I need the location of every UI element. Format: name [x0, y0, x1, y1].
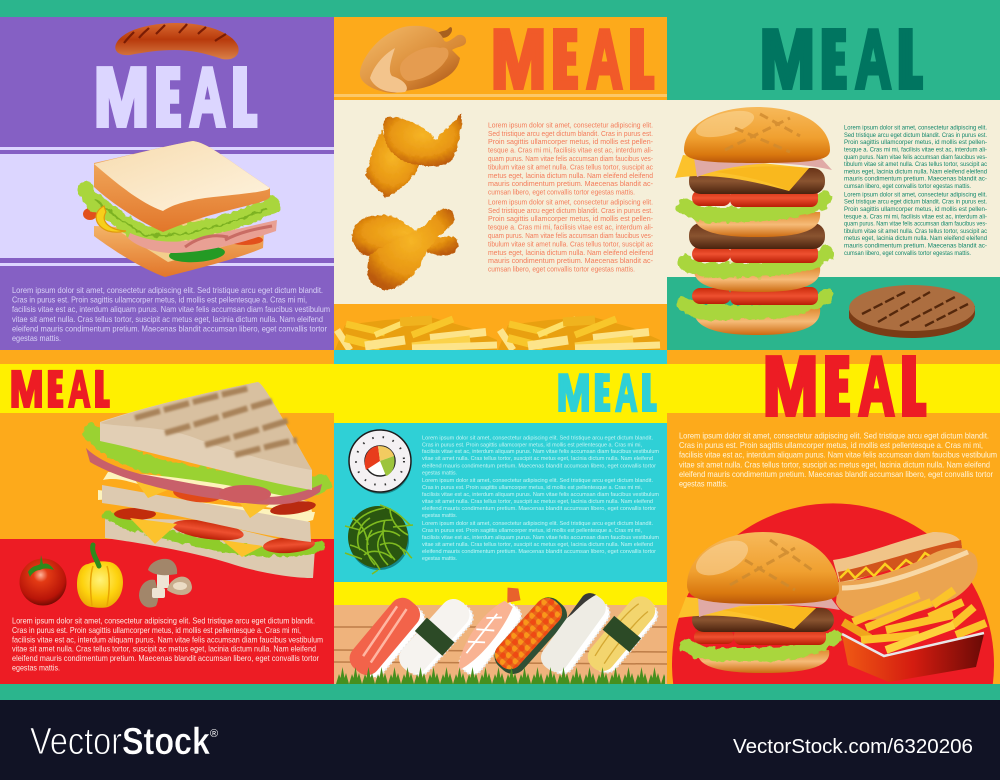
icon: french fries row [335, 317, 660, 350]
heading: MEAL: A [190, 50, 226, 144]
text block: burger panel: Proin sagittis ullamcorper metus, id mollis est pellen- [844, 139, 987, 146]
text block: sushi panel: eleifend mauris condimentum pretium. Maecenas blandit accumsan libero, eget convallis tortor [422, 549, 656, 555]
text block: sushi panel: egestas mattis. [422, 513, 457, 519]
icon: yellow pepper [77, 545, 123, 608]
text block: red panel: facilisis vitae est ac, interdum aliquam purus. Nam vitae felis accumsan diam faucibus vestibulum [12, 634, 323, 644]
icon: fries in red tray [842, 590, 986, 682]
text block: chicken panel: tibulum vitae sit amet nulla. Cras tellus tortor, suscipit ac [488, 162, 653, 171]
heading: MEAL: A [615, 364, 637, 422]
text block: sushi panel: Cras in purus est. Proin sagittis ullamcorper metus, id mollis est pellentesque a. Cras mi mi, [422, 528, 642, 534]
icon: grilled patty [849, 285, 975, 338]
panel: burger and hot dog [667, 340, 1000, 684]
text block: sushi panel: eleifend mauris condimentum pretium. Maecenas blandit accumsan libero, eget convallis tortor [422, 463, 656, 469]
panel: sushi: L [642, 364, 657, 422]
heading: MEAL: E [553, 12, 578, 106]
text block: burger panel: Proin sagittis ullamcorper metus, id mollis est pellen- [844, 206, 987, 213]
text block: sushi panel: facilisis vitae est ac, interdum aliquam purus. Nam vitae felis accumsan diam faucibus vestibulum [422, 535, 659, 541]
text block: burger panel: Sed tristique arcu eget dictum blandit. Cras in purus est. [844, 199, 987, 206]
icon: fried wing pieces [365, 114, 462, 198]
icon: tamago nigiri [580, 589, 664, 679]
heading: MEAL [763, 340, 926, 432]
text block: purple panel: vitae sit amet nulla. Cras tellus tortor, suscipit ac metus eget, lacinia dictum nulla. Nam eleifend [12, 314, 323, 324]
text block: burger panel: tibulum vitae sit amet nulla. Cras tellus tortor, suscipit ac [844, 228, 988, 235]
heading: MEAL: A [68, 360, 90, 418]
icon: cheeseburger [678, 532, 840, 673]
icon: sushi roll [349, 430, 411, 494]
text block: purple panel: egestas mattis. [12, 333, 61, 343]
text block: burger and hot dog panel: egestas mattis. [679, 479, 728, 489]
icon: club sandwich [86, 382, 322, 578]
text block: sushi panel: egestas mattis. [422, 471, 457, 477]
text block: sushi panel [422, 435, 659, 562]
text block: red panel: eleifend mauris condimentum pretium. Maecenas blandit accumsan libero, eget convallis tortor [12, 653, 319, 663]
text block: chicken panel: metus eget, lacinia dictum nulla. Nam eleifend eleifend [488, 248, 653, 257]
heading: MEAL [557, 364, 657, 422]
panel: teal burger [667, 12, 1000, 350]
text block: sushi panel: facilisis vitae est ac, interdum aliquam purus. Nam vitae felis accumsan diam faucibus vestibulum [422, 492, 659, 498]
text block: sushi panel: vitae sit amet nulla. Cras tellus tortor, suscipit ac metus eget, lacinia dictum nulla. Nam eleifend [422, 456, 653, 462]
icon: salmon nigiri [344, 592, 430, 684]
text block: burger panel: mauris condimentum pretium. Maecenas blandit ac- [844, 176, 987, 183]
text block: burger panel: tesque a. Cras mi mi, facilisis vitae est ac, interdum ali- [844, 146, 987, 154]
text block: chicken panel: mauris condimentum pretium. Maecenas blandit ac- [488, 179, 653, 188]
heading: MEAL: M [491, 12, 546, 106]
heading: MEAL [10, 360, 110, 418]
icon: roast chicken [360, 26, 466, 93]
heading: MEAL: A [586, 12, 622, 106]
text block: purple panel: facilisis vitae est ac, interdum aliquam purus. Nam vitae felis accumsan diam faucibus vestibulum [12, 304, 330, 314]
heading: MEAL: M [94, 50, 149, 144]
decorative grass strip [336, 664, 665, 684]
text block: chicken panel: Lorem ipsum dolor sit amet, consectetur adipiscing elit. [488, 197, 653, 206]
text block: chicken panel: tibulum vitae sit amet nulla. Cras tellus tortor, suscipit ac [488, 239, 653, 248]
heading: MEAL: A [855, 12, 891, 106]
text block: sushi panel: eleifend mauris condimentum pretium. Maecenas blandit accumsan libero, eget convallis tortor [422, 506, 656, 512]
text block: sushi panel: Cras in purus est. Proin sagittis ullamcorper metus, id mollis est pellentesque a. Cras mi mi, [422, 485, 642, 491]
panel: burger and hot dog: L [902, 340, 926, 432]
panel: sushi [334, 350, 667, 684]
heading: MEAL [491, 12, 654, 106]
text block: chicken panel: Sed tristique arcu eget dictum blandit. Cras in purus est. [488, 206, 653, 215]
text block: purple panel: eleifend mauris condimentum pretium. Maecenas blandit accumsan libero, eget convallis tortor [12, 323, 327, 333]
icon: fried drumsticks [352, 209, 458, 290]
text block: purple panel [12, 285, 330, 343]
decorative red circle [672, 503, 994, 684]
text block: chicken panel: Sed tristique arcu eget dictum blandit. Cras in purus est. [488, 129, 653, 138]
text block: chicken panel: quam purus. Nam vitae felis accumsan diam faucibus ves- [488, 231, 653, 240]
text block: red panel: egestas mattis. [12, 662, 60, 672]
heading: MEAL: M [10, 360, 44, 418]
heading: MEAL [94, 50, 257, 144]
text block: chicken panel: metus eget, lacinia dictum nulla. Nam eleifend eleifend [488, 171, 653, 180]
text block: chicken panel: tesque a. Cras mi mi, facilisis vitae est ac, interdum ali- [488, 223, 653, 232]
text block: sushi panel: vitae sit amet nulla. Cras tellus tortor, suscipit ac metus eget, lacinia dictum nulla. Nam eleifend [422, 542, 653, 548]
heading: MEAL: E [156, 50, 182, 144]
panel: orange chicken: L [630, 12, 654, 106]
heading: MEAL: M [763, 340, 818, 432]
text block: red panel: vitae sit amet nulla. Cras tellus tortor, suscipit ac metus eget, lacinia dictum nulla. Nam eleifend [12, 644, 316, 654]
text block: chicken panel [488, 120, 653, 273]
icon: roe gunkan [489, 592, 573, 680]
panel: purple sandwich: L [233, 50, 257, 144]
text block: sushi panel: facilisis vitae est ac, interdum aliquam purus. Nam vitae felis accumsan diam faucibus vestibulum [422, 449, 659, 455]
heading: MEAL [760, 12, 923, 106]
text block: chicken panel: mauris condimentum pretium. Maecenas blandit ac- [488, 256, 653, 265]
text block: chicken panel: Proin sagittis ullamcorper metus, id mollis est pellen- [488, 214, 653, 223]
icon: mushrooms [139, 559, 192, 608]
text block: chicken panel: tesque a. Cras mi mi, facilisis vitae est ac, interdum ali- [488, 146, 653, 155]
text block: burger panel: tesque a. Cras mi mi, facilisis vitae est ac, interdum ali- [844, 213, 987, 220]
text block: burger panel [844, 125, 988, 257]
text block: chicken panel: Lorem ipsum dolor sit amet, consectetur adipiscing elit. [488, 120, 653, 129]
icon: hot dog [833, 532, 978, 620]
text block: chicken panel: quam purus. Nam vitae felis accumsan diam faucibus ves- [488, 154, 653, 163]
panel: red club sandwich: L [95, 360, 110, 418]
text block: burger panel: Lorem ipsum dolor sit amet, consectetur adipiscing elit. [844, 191, 987, 198]
wordmark: VectorStock: ® [210, 728, 218, 740]
icon: sausage [115, 23, 239, 59]
text block: sushi panel: Lorem ipsum dolor sit amet, consectetur adipiscing elit. Sed tristique arcu eget dictum blandit. [422, 521, 653, 527]
footer bar [0, 700, 1000, 780]
icon: seaweed salad [345, 505, 413, 574]
text block: sushi panel: vitae sit amet nulla. Cras tellus tortor, suscipit ac metus eget, lacinia dictum nulla. Nam eleifend [422, 499, 653, 505]
wordmark: VectorStock: VectorStock [30, 721, 225, 763]
source URL: VectorStock.com/6320206 [733, 736, 973, 758]
text block: sushi panel: egestas mattis. [422, 556, 457, 562]
icon: white fish nigiri [536, 589, 615, 680]
text block: sushi panel: Cras in purus est. Proin sagittis ullamcorper metus, id mollis est pellentesque a. Cras mi mi, [422, 442, 642, 448]
panel: purple sandwich [0, 17, 334, 350]
text block: chicken panel: cumsan libero, eget convallis tortor egestas mattis. [488, 187, 635, 196]
text block: burger panel: metus eget, lacinia dictum nulla. Nam eleifend eleifend [844, 235, 987, 242]
text block: burger panel: cumsan libero, eget convallis tortor egestas mattis. [844, 250, 971, 257]
text block: burger panel: cumsan libero, eget convallis tortor egestas mattis. [844, 183, 971, 190]
text block: burger and hot dog panel [679, 431, 997, 489]
text block: purple panel: Lorem ipsum dolor sit amet, consectetur adipiscing elit. Sed tristique arcu eget dictum blandit. [12, 285, 323, 295]
heading: MEAL: E [822, 12, 847, 106]
text block: burger panel: mauris condimentum pretium. Maecenas blandit ac- [844, 242, 987, 250]
heading: MEAL: A [858, 340, 894, 432]
text block: chicken panel: Proin sagittis ullamcorper metus, id mollis est pellen- [488, 137, 653, 146]
icon: tomato [20, 555, 66, 606]
text block: burger panel: metus eget, lacinia dictum nulla. Nam eleifend eleifend [844, 168, 987, 175]
heading: MEAL: M [557, 364, 591, 422]
heading: MEAL: E [825, 340, 850, 432]
text block: red panel: Cras in purus est. Proin sagittis ullamcorper metus, id mollis est pellentesque a. Cras mi mi, [12, 625, 301, 635]
icon: squid nigiri [391, 592, 478, 682]
text block: burger panel: Sed tristique arcu eget dictum blandit. Cras in purus est. [844, 132, 987, 139]
text block: red panel: Lorem ipsum dolor sit amet, consectetur adipiscing elit. Sed tristique arcu eget dictum blandit. [12, 616, 315, 626]
text block: burger panel: tibulum vitae sit amet nulla. Cras tellus tortor, suscipit ac [844, 161, 988, 168]
text block: burger panel: Lorem ipsum dolor sit amet, consectetur adipiscing elit. [844, 125, 987, 132]
text block: sushi panel: Lorem ipsum dolor sit amet, consectetur adipiscing elit. Sed tristique arcu eget dictum blandit. [422, 478, 653, 484]
heading: MEAL: E [595, 364, 610, 422]
text block: sushi panel: Lorem ipsum dolor sit amet, consectetur adipiscing elit. Sed tristique arcu eget dictum blandit. [422, 435, 653, 441]
heading: MEAL: E [48, 360, 64, 418]
panel: orange chicken [334, 12, 667, 350]
icon: triple burger [675, 106, 832, 335]
icon: sandwich [83, 141, 277, 277]
panel: teal burger: L [898, 12, 923, 106]
text block: red panel [12, 616, 323, 672]
icon: shrimp nigiri [448, 582, 535, 682]
text block: chicken panel: cumsan libero, eget convallis tortor egestas mattis. [488, 264, 635, 273]
text block: purple panel: Cras in purus est. Proin sagittis ullamcorper metus, id mollis est pellentesque a. Cras mi mi, [12, 295, 307, 305]
panel: red club sandwich [0, 350, 334, 684]
heading: MEAL: M [760, 12, 815, 106]
